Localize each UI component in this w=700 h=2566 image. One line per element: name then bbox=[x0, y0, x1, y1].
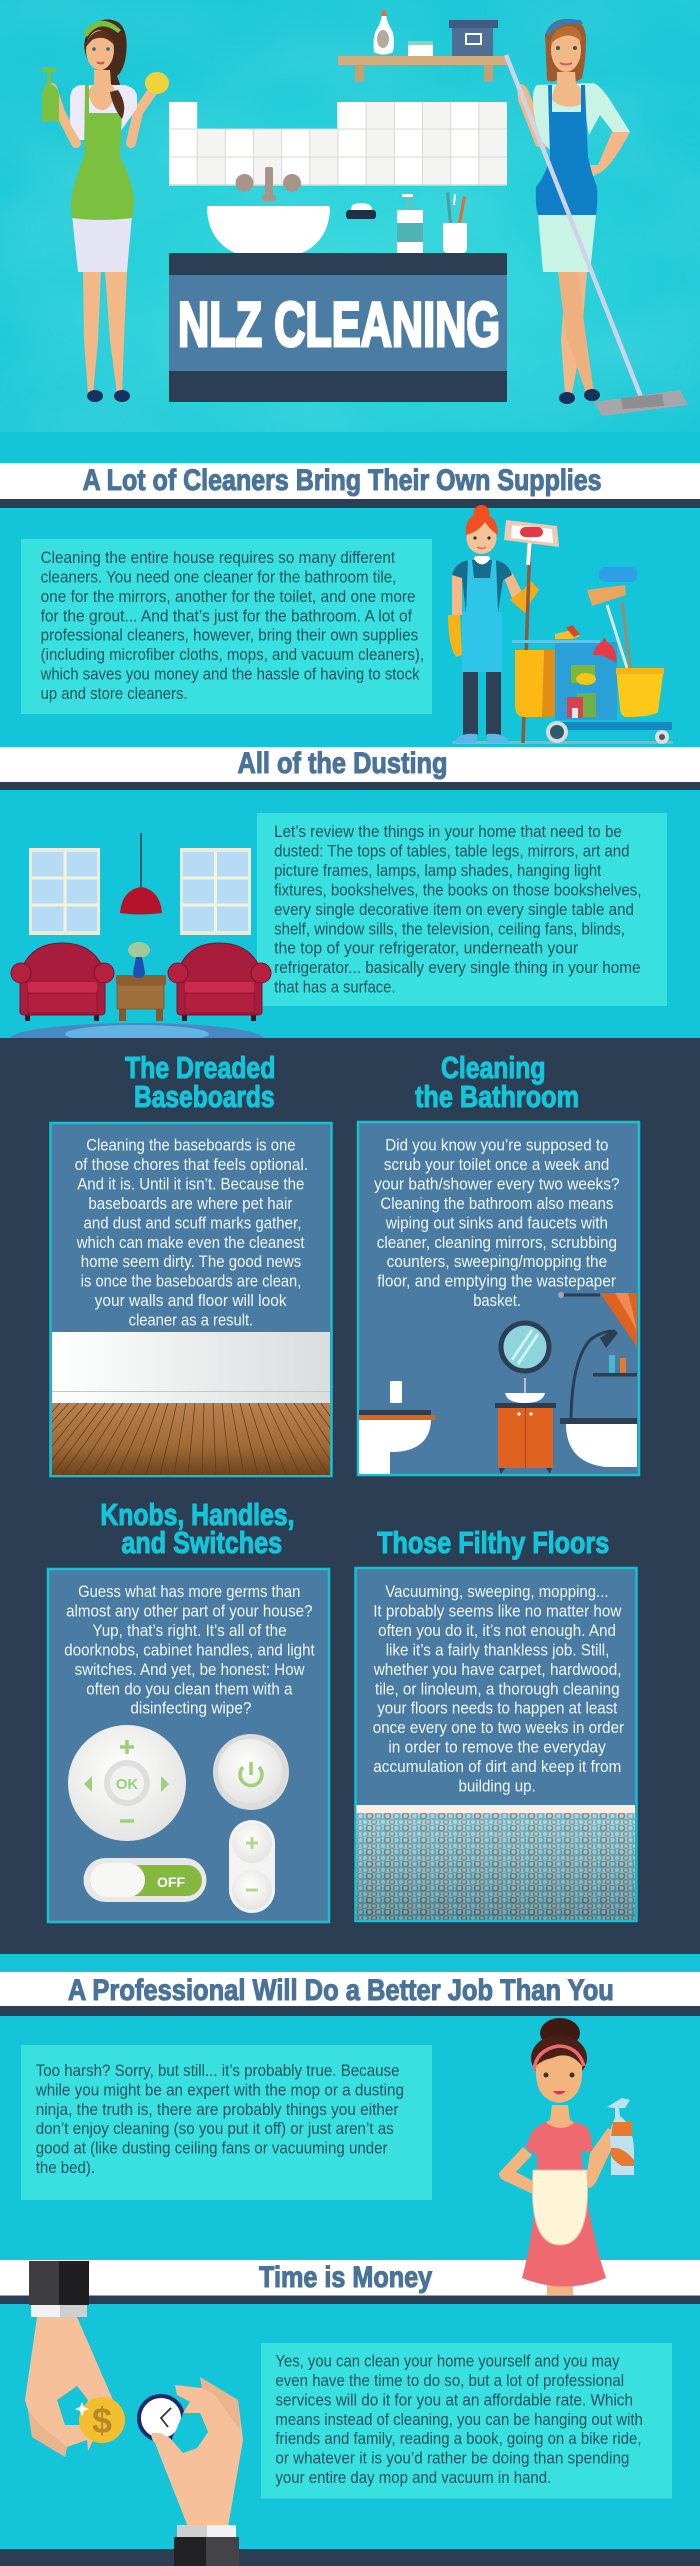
vanity counter with logo title bbox=[169, 253, 507, 402]
panel: baseboards: which can make even the cleanest bbox=[76, 1233, 305, 1252]
heading: Time is Money bbox=[259, 2261, 432, 2294]
panel: baseboards: baseboards are where pet hair bbox=[88, 1194, 293, 1213]
text panel: time is money: or whatever it is you’d rather be doing than spending bbox=[275, 2449, 629, 2468]
panel: bathroom bbox=[358, 1122, 639, 1475]
panel: knobs bbox=[48, 1569, 329, 1922]
panel: knobs: switches. And yet, be honest: How bbox=[75, 1660, 305, 1679]
panel: floors: like it’s a fairly thankless job. Still, bbox=[386, 1640, 609, 1659]
icon: round mirror bbox=[501, 1323, 549, 1371]
panel: bathroom: floor, and emptying the wastepaper bbox=[377, 1272, 616, 1291]
heading: Cleaning the Bathroom bbox=[415, 1050, 579, 1114]
image: wall and wood floor bbox=[52, 1332, 330, 1475]
icon: left armchair bbox=[11, 943, 114, 1021]
text panel: cleaners bring supplies: up and store cleaners. bbox=[41, 684, 187, 703]
wall tiles bbox=[169, 102, 507, 185]
hand holding clock bbox=[139, 2377, 243, 2566]
image: patterned tile floor bbox=[356, 1805, 635, 1920]
panel: bathroom: Cleaning the bathroom also means bbox=[380, 1194, 613, 1213]
text panel: cleaners bring supplies: (including microfiber cloths, mops, and vacuum cleaners), bbox=[41, 645, 424, 664]
text panel: cleaners bring supplies: one for the mirrors, another for the toilet, and one more bbox=[41, 587, 416, 606]
text panel: dusting: Let’s review the things in your home that need to be bbox=[274, 822, 622, 841]
text panel: professional: ninja, the truth is, there are probably things you either bbox=[36, 2100, 399, 2119]
icon: toggle switch: OFF bbox=[157, 1874, 185, 1890]
panel: knobs: almost any other part of your house? bbox=[66, 1602, 312, 1620]
text panel: cleaners bring supplies: for the grout... And that’s just for the bathroom. A lot of bbox=[41, 606, 412, 625]
panel: floors: tile, or linoleum, a thorough cleaning bbox=[375, 1679, 620, 1698]
section band: A Lot of Cleaners Bring Their Own Supplies bbox=[0, 463, 700, 508]
icon: OK dial: OK bbox=[116, 1776, 138, 1793]
heading: All of the Dusting bbox=[238, 747, 448, 780]
section band: A Professional Will Do a Better Job Than You bbox=[0, 1972, 700, 2016]
title: NLZ Cleaning: NLZ CLEANING bbox=[178, 290, 500, 360]
heading: The Dreaded Baseboards bbox=[125, 1050, 275, 1114]
text panel: cleaners bring supplies: professional cleaners, however, bring their own supplies bbox=[41, 626, 418, 645]
icon: right window bbox=[180, 848, 251, 935]
soap, pump bottle and toothbrush cup bbox=[346, 192, 467, 253]
text panel: cleaners bring supplies: Cleaning the entire house requires so many different bbox=[41, 548, 395, 567]
text panel: time is money: means instead of cleaning, you can be hanging out with bbox=[275, 2410, 643, 2429]
text panel: professional: the bed). bbox=[36, 2158, 95, 2177]
text panel: dusting: the top of your refrigerator, underneath your bbox=[274, 939, 578, 958]
icon: gold coin bbox=[75, 2397, 125, 2443]
panel: bathroom: counters, sweeping/mopping the bbox=[387, 1252, 607, 1271]
heading: Cleaning the Bathroom: Cleaning bbox=[441, 1050, 546, 1085]
panel: baseboards: of those chores that feels optional. bbox=[75, 1155, 308, 1174]
text panel: dusting: fixtures, bookshelves, the books on those bookshelves, bbox=[274, 880, 642, 899]
icon: side table with vase bbox=[116, 942, 166, 1021]
panel: bathroom: basket. bbox=[473, 1291, 521, 1310]
panel: knobs: often do you clean them with a bbox=[86, 1679, 293, 1698]
hero textured backdrop bbox=[0, 0, 700, 432]
icon: hanging lamp bbox=[120, 833, 162, 914]
panel: baseboards: and dust and scuff marks gather, bbox=[84, 1213, 301, 1232]
icon: right armchair bbox=[168, 943, 271, 1021]
panel: floors: building up. bbox=[458, 1776, 536, 1796]
text panel: professional: don’t enjoy cleaning (so you put it off) or just aren’t as bbox=[36, 2119, 394, 2138]
panel: baseboards: cleaner as a result. bbox=[129, 1311, 253, 1330]
text panel: cleaners bring supplies: cleaners. You need one cleaner for the bathroom tile, bbox=[41, 567, 396, 586]
icon: yellow sponge bbox=[145, 72, 169, 94]
panel: bathroom: scrub your toilet once a week and bbox=[384, 1155, 609, 1174]
section band: Time is Money bbox=[0, 2260, 700, 2304]
left cleaner woman in green apron bbox=[42, 19, 169, 402]
icon: clock bbox=[139, 2396, 183, 2440]
icon: spray bottle bbox=[607, 2098, 634, 2175]
faucet and sink bbox=[207, 167, 330, 253]
panel: floors: your floors needs to happen at least bbox=[377, 1699, 618, 1718]
shelf with products bbox=[338, 10, 507, 82]
panel: baseboards: home seem dirty. The good news bbox=[81, 1252, 301, 1271]
panel: floors: often you do it, it’s not enough. And bbox=[378, 1621, 616, 1640]
text panel: time is money: even have the time to do so, but a lot of professional bbox=[275, 2371, 624, 2390]
icon: plus minus rocker bbox=[229, 1820, 275, 1913]
rug bbox=[10, 1023, 264, 1055]
text panel: dusting: picture frames, lamps, lamp shades, hanging light bbox=[274, 861, 602, 880]
panel: floors: accumulation of dirt and keep it from bbox=[373, 1757, 621, 1776]
panel: baseboards: your walls and floor will look bbox=[95, 1291, 287, 1310]
text panel: dusting: dusted: The tops of tables, table legs, mirrors, art and bbox=[274, 842, 630, 860]
heading: Knobs, Handles, and Switches: and Switches bbox=[121, 1525, 282, 1560]
panel: floors: Vacuuming, sweeping, mopping... bbox=[385, 1582, 608, 1601]
text panel: professional: good at (like dusting ceiling fans or vacuuming under bbox=[36, 2139, 388, 2158]
text panel: professional bbox=[21, 2045, 432, 2200]
text panel: time is money: friends and family, reading a book, going on a bike ride, bbox=[275, 2429, 642, 2448]
right cleaner woman in blue apron with mop bbox=[506, 19, 688, 416]
heading: Knobs, Handles, and Switches bbox=[100, 1497, 294, 1560]
panel: baseboards: is once the baseboards are clean, bbox=[81, 1272, 301, 1291]
heading: A Professional Will Do a Better Job Than You bbox=[68, 1974, 614, 2007]
panel: floors bbox=[356, 1568, 636, 1921]
panel: floors: once every one to two weeks in order bbox=[373, 1718, 624, 1737]
panel: baseboards: Cleaning the baseboards is one bbox=[86, 1136, 296, 1154]
panel: knobs: Yup, that’s right. It’s all of the bbox=[92, 1621, 287, 1640]
panel: floors: in order to remove the everyday bbox=[388, 1738, 606, 1757]
icon: OK dial bbox=[68, 1725, 186, 1841]
icon: toilet bbox=[359, 1381, 435, 1474]
panel: bathroom: wiping out sinks and faucets with bbox=[385, 1213, 608, 1232]
hand holding coin bbox=[25, 2261, 125, 2457]
icon: cleaning cart bbox=[512, 567, 672, 744]
text panel: professional: while you might be an expert with the mop or a dusting bbox=[35, 2080, 404, 2099]
heading: A Lot of Cleaners Bring Their Own Supplies bbox=[83, 464, 602, 497]
maid with spray bottle bbox=[499, 2018, 634, 2295]
panel: knobs: disinfecting wipe? bbox=[130, 1699, 251, 1718]
heading: The Dreaded Baseboards: The Dreaded bbox=[125, 1050, 275, 1085]
text panel: professional: Too harsh? Sorry, but still... it’s probably true. Because bbox=[36, 2061, 399, 2080]
panel: floors: It probably seems like no matter how bbox=[373, 1602, 622, 1620]
text panel: time is money: Yes, you can clean your home yourself and you may bbox=[275, 2352, 620, 2371]
icon: green spray bottle bbox=[42, 67, 59, 122]
icon: toggle switch bbox=[84, 1858, 206, 1902]
icon: vanity cabinet bbox=[495, 1378, 556, 1474]
panel: baseboards bbox=[50, 1123, 332, 1476]
icon: left window bbox=[29, 848, 100, 935]
text panel: dusting bbox=[257, 813, 667, 1006]
icon: gold coin: $ bbox=[92, 2400, 112, 2441]
text panel: dusting: every single decorative item on every single table and bbox=[274, 900, 634, 919]
text panel: cleaners bring supplies: which saves you money and the hassle of having to stock bbox=[40, 665, 420, 684]
text panel: time is money bbox=[261, 2343, 672, 2498]
section band: All of the Dusting bbox=[0, 747, 700, 790]
panel: bathroom: cleaner, cleaning mirrors, scrubbing bbox=[377, 1233, 617, 1252]
icon: power button bbox=[213, 1734, 289, 1810]
heading: Cleaning the Bathroom: the Bathroom bbox=[415, 1079, 579, 1114]
text panel: time is money: services will do it for you at an affordable rate. Which bbox=[275, 2390, 633, 2409]
panel: baseboards: And it is. Until it isn’t. Because the bbox=[77, 1174, 304, 1193]
text panel: time is money: your entire day mop and vacuum in hand. bbox=[275, 2468, 551, 2487]
text panel: dusting: shelf, window sills, the television, ceiling fans, blinds, bbox=[274, 919, 625, 938]
heading: Those Filthy Floors: Those Filthy Floors bbox=[377, 1525, 609, 1560]
heading: The Dreaded Baseboards: Baseboards bbox=[134, 1079, 275, 1114]
panel: floors: whether you have carpet, hardwood, bbox=[373, 1660, 622, 1679]
heading: Knobs, Handles, and Switches: Knobs, Handles, bbox=[100, 1497, 294, 1532]
panel: bathroom: Did you know you’re supposed to bbox=[385, 1136, 608, 1154]
icon: mop bbox=[506, 55, 688, 416]
panel: bathroom: your bath/shower every two weeks? bbox=[374, 1174, 620, 1193]
text panel: dusting: that has a surface. bbox=[274, 978, 396, 997]
living room illustration bbox=[10, 833, 271, 1055]
dark section background bbox=[0, 1038, 700, 1954]
text panel: dusting: refrigerator... basically every single thing in your home bbox=[274, 958, 641, 977]
icon: mop held by janitor bbox=[504, 520, 559, 743]
janitor with cleaning cart bbox=[448, 505, 673, 744]
icon: bathtub with shower bbox=[558, 1292, 637, 1467]
text panel: cleaners bring supplies bbox=[21, 539, 432, 714]
panel: knobs: doorknobs, cabinet handles, and light bbox=[64, 1640, 315, 1659]
bottom navy bar bbox=[0, 2549, 700, 2566]
panel: knobs: Guess what has more germs than bbox=[78, 1582, 300, 1601]
